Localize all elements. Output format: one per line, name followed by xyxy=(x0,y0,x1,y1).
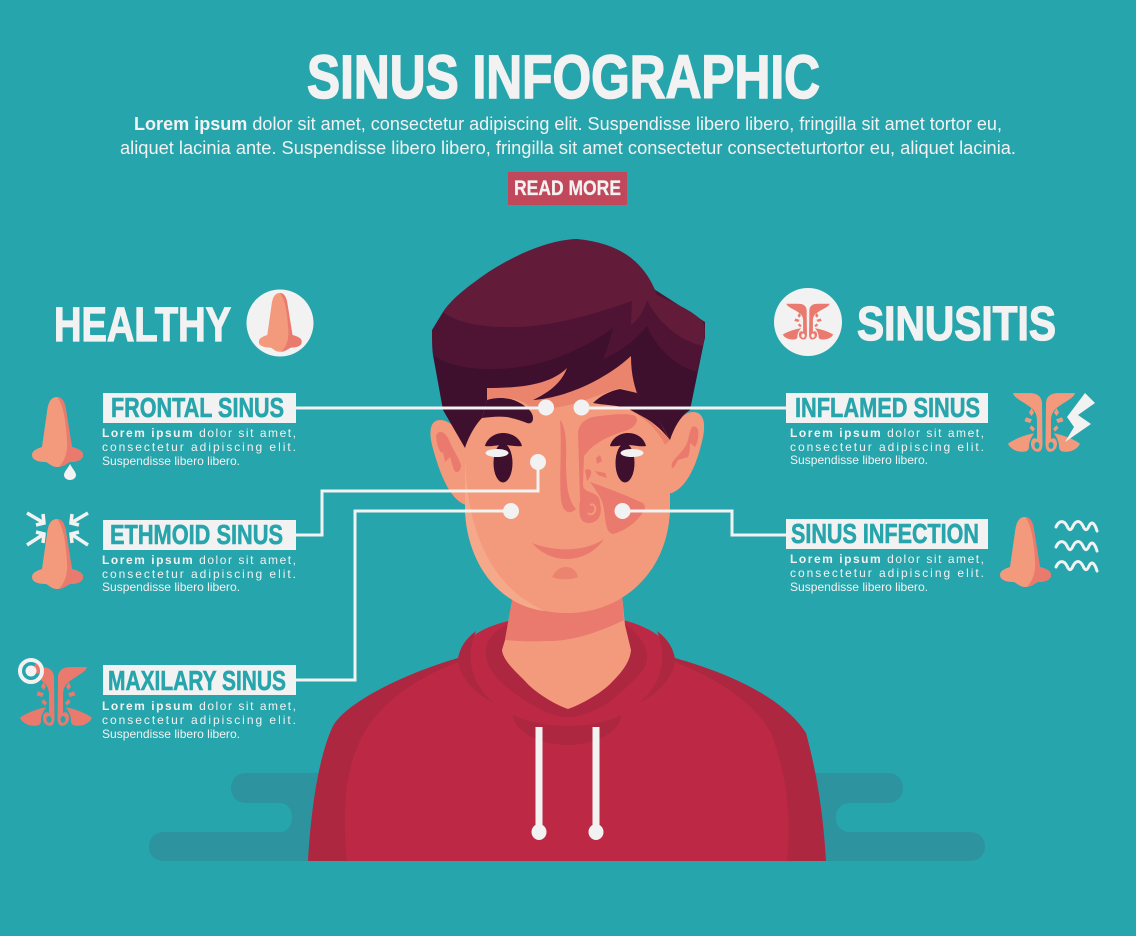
text: frontal sinus description xyxy=(102,426,296,468)
under-brow shade xyxy=(627,408,670,445)
icon: healthy nose badge xyxy=(246,290,314,356)
text: ethmoid sinus description: Suspendisse libero libero. xyxy=(102,580,240,594)
right eye xyxy=(610,433,646,482)
icon: sinusitis badge xyxy=(774,288,842,356)
heading: sinusitis: SINUSITIS xyxy=(857,298,1056,351)
heading: healthy: HEALTHY xyxy=(54,299,231,352)
face xyxy=(465,350,670,613)
hair mid layer xyxy=(432,280,705,372)
mouth xyxy=(532,539,604,559)
panel: frontal sinus xyxy=(32,392,296,480)
right ear xyxy=(665,412,704,494)
pouch shadow xyxy=(513,715,621,745)
face highlight xyxy=(465,455,545,611)
hair dark base xyxy=(433,300,705,448)
hood collar xyxy=(458,620,675,725)
text: ethmoid sinus description xyxy=(102,553,296,594)
hoodie front xyxy=(345,662,789,861)
label: sinus infection: SINUS INFECTION xyxy=(791,518,979,549)
panel: maxilary sinus xyxy=(20,660,296,741)
text: maxilary sinus description: Lorem ipsum dolor sit amet, xyxy=(102,699,296,713)
chin mark xyxy=(552,567,578,579)
icon: nose with waves xyxy=(1000,517,1097,587)
character illustration xyxy=(308,239,826,861)
marker dots xyxy=(503,400,630,519)
text: frontal sinus description: consectetur adipiscing elit. xyxy=(102,440,296,454)
hood inner band xyxy=(486,623,647,717)
read more button xyxy=(508,172,627,205)
label: ethmoid sinus: ETHMOID SINUS xyxy=(110,519,283,550)
neck shadow xyxy=(505,595,624,641)
left eye highlight xyxy=(486,449,508,457)
icon: nose with pressure arrows xyxy=(27,513,88,589)
panel: sinus infection xyxy=(786,517,1097,594)
connector lines xyxy=(296,408,788,680)
drawstrings xyxy=(532,727,604,840)
nose line xyxy=(560,420,576,512)
text: sinus infection description: Lorem ipsum dolor sit amet, xyxy=(790,552,984,566)
label: frontal sinus: FRONTAL SINUS xyxy=(111,392,284,423)
text: ethmoid sinus description: Lorem ipsum dolor sit amet, xyxy=(102,553,296,567)
text: frontal sinus description: Suspendisse libero libero. xyxy=(102,454,240,468)
intro text block xyxy=(120,114,1016,158)
text: frontal sinus description: Lorem ipsum dolor sit amet, xyxy=(102,426,296,440)
text: maxilary sinus description: consectetur adipiscing elit. xyxy=(102,713,296,727)
read more button: READ MORE xyxy=(514,177,621,200)
text: inflamed sinus description: Suspendisse libero libero. xyxy=(790,453,928,467)
left eye xyxy=(485,433,522,482)
title: SINUS INFOGRAPHIC xyxy=(307,43,820,111)
text: inflamed sinus description: consectetur adipiscing elit. xyxy=(790,440,984,454)
text: inflamed sinus description: Lorem ipsum dolor sit amet, xyxy=(790,426,984,440)
icon: sinus with lightning xyxy=(1008,393,1095,452)
hoodie body xyxy=(308,620,826,861)
text: ethmoid sinus description: consectetur adipiscing elit. xyxy=(102,567,296,581)
icon: nose with drop xyxy=(32,397,83,480)
text: maxilary sinus description: Suspendisse libero libero. xyxy=(102,727,240,741)
panel: inflamed sinus xyxy=(786,392,1095,467)
panel: ethmoid sinus xyxy=(27,513,296,594)
label: inflamed sinus: INFLAMED SINUS xyxy=(795,392,980,423)
label: maxilary sinus: MAXILARY SINUS xyxy=(108,665,286,696)
right eyebrow xyxy=(593,389,670,440)
text: maxilary sinus description xyxy=(102,699,296,741)
left eyebrow xyxy=(482,398,533,423)
forehead shade xyxy=(480,350,640,410)
hair top layer xyxy=(443,239,704,346)
intro text block: Lorem ipsum dolor sit amet, consectetur adipiscing elit. Suspendisse libero libero, fringilla sit amet tortor eu, xyxy=(134,114,1002,134)
ground shadow blobs xyxy=(149,773,985,861)
left ear xyxy=(430,420,470,505)
sinus cavities xyxy=(578,414,645,534)
neck xyxy=(502,595,631,709)
hood outer creases xyxy=(458,631,675,703)
text: sinus infection description: Suspendisse libero libero. xyxy=(790,580,928,594)
right eye highlight xyxy=(620,449,644,457)
text: inflamed sinus description xyxy=(790,426,984,467)
icon: sinus with target ring xyxy=(20,660,92,726)
text: sinus infection description: consectetur adipiscing elit. xyxy=(790,566,984,580)
intro text block: aliquet lacinia ante. Suspendisse libero libero, fringilla sit amet consectetur consecteturtortor eu, aliquet lacinia. xyxy=(120,138,1016,158)
text: sinus infection description xyxy=(790,552,984,594)
